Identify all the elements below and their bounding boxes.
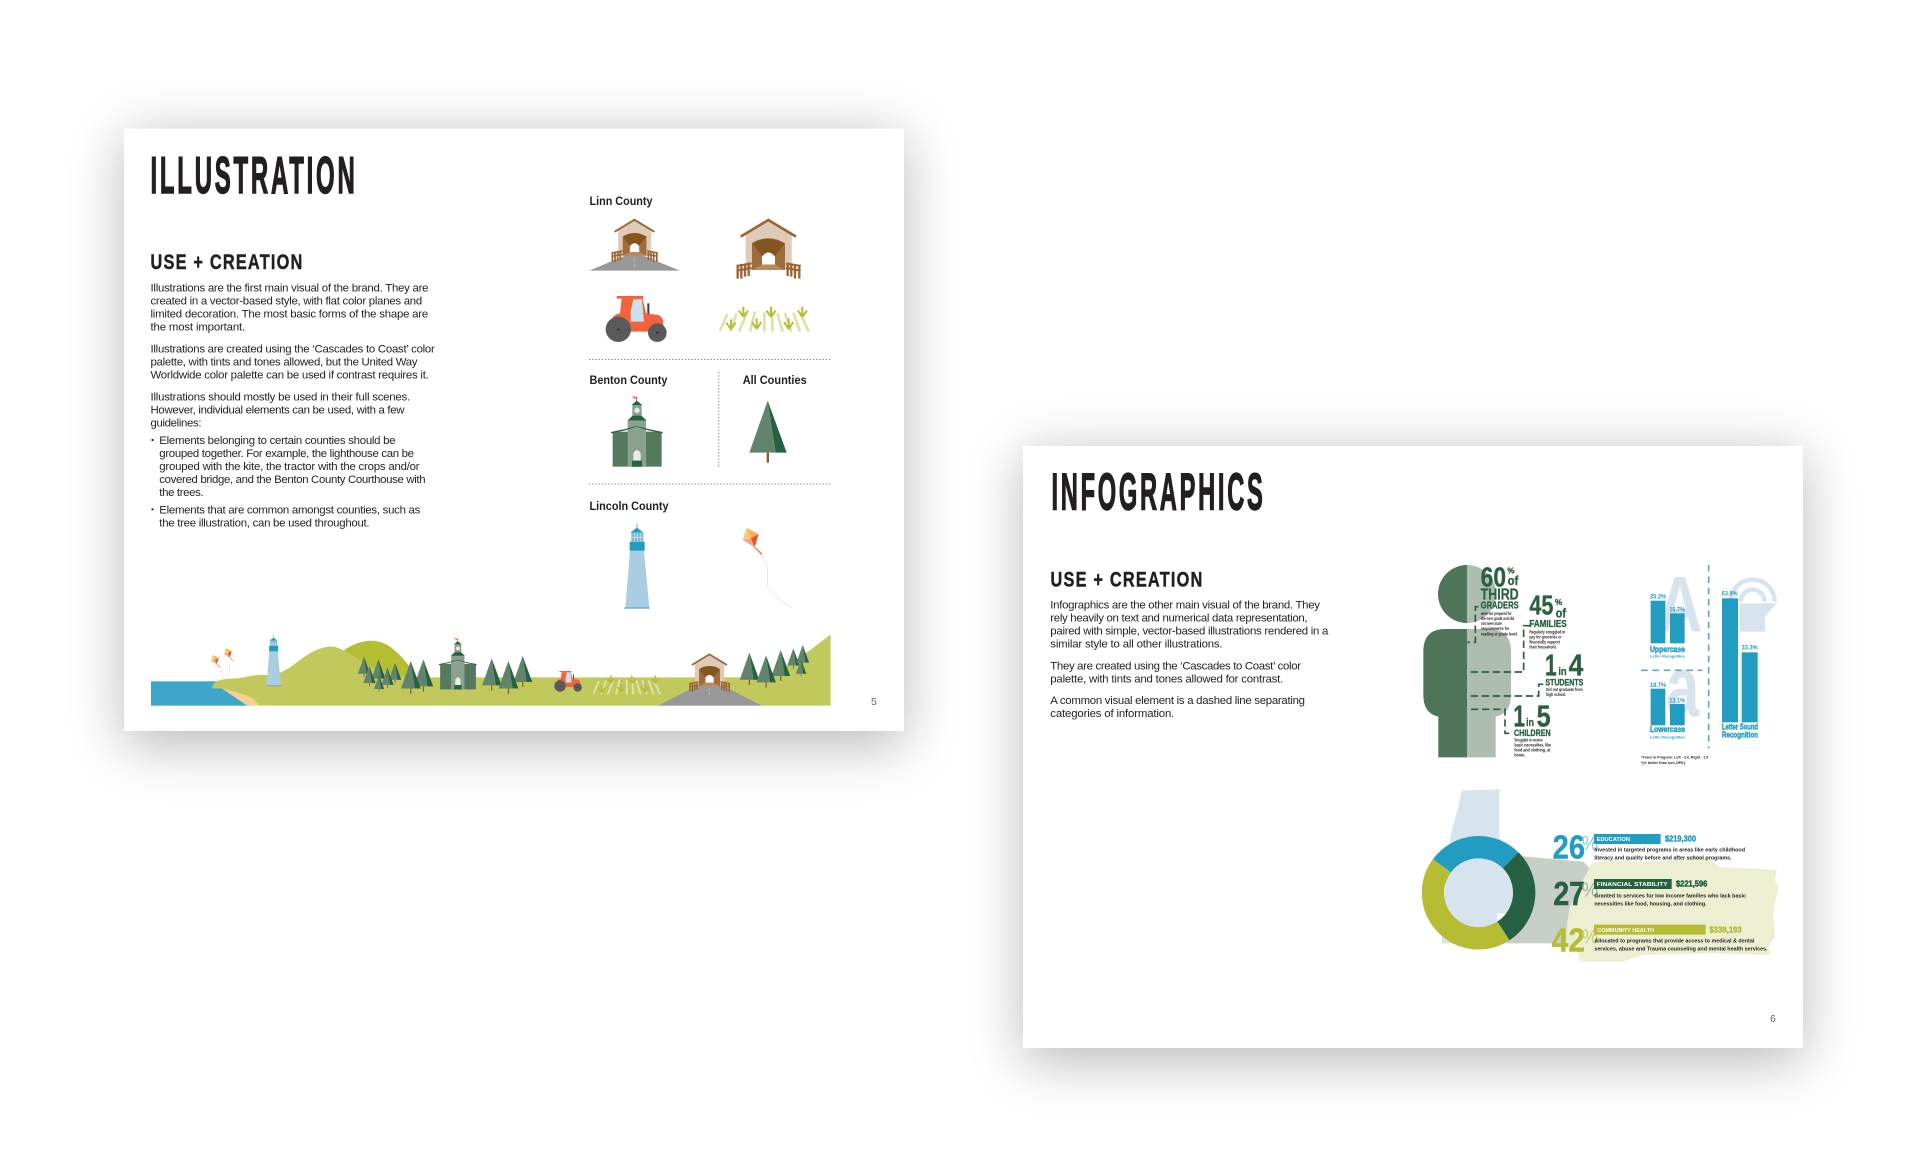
bar labels: Letter Sound	[1722, 723, 1758, 732]
stat: 45 percent of families: of	[1556, 606, 1567, 620]
stat: 60 percent of third graders: the next grade and did	[1481, 616, 1515, 621]
footnote	[1641, 754, 1709, 765]
bar labels: Lowercase	[1650, 725, 1685, 734]
row: community health: Allocated to programs that provide access to medical & dental	[1594, 939, 1755, 945]
row: community health: %	[1582, 926, 1599, 948]
text block: illustration guidance: Illustrations are the first main visual of the brand. They are	[150, 282, 428, 294]
label: Lincoln County: Lincoln County	[590, 499, 669, 513]
page shadows	[124, 136, 904, 746]
stat: 1 in 4 students: high school.	[1546, 692, 1566, 697]
map: state shapes	[1442, 789, 1778, 962]
panel: illustration page: ILLUSTRATION	[150, 147, 358, 205]
stat: 45 percent of families	[1529, 589, 1567, 649]
bar labels: Letter Recognition	[1650, 654, 1686, 659]
text block: illustration guidance: covered bridge, and the Benton County Courthouse with	[159, 474, 426, 486]
text block: infographic guidance: They are created using the ‘Cascades to Coast’ color	[1050, 660, 1301, 672]
row: community health: $338,193	[1709, 926, 1742, 935]
stat: 1 in 4 students: 4	[1569, 649, 1583, 683]
stat: 60 percent of third graders: of	[1508, 574, 1519, 588]
stat: 1 in 4 students: 1	[1545, 649, 1557, 683]
stat: 45 percent of families: %	[1555, 598, 1562, 607]
label: Benton County: Benton County	[590, 373, 668, 387]
row: education: 26	[1553, 829, 1585, 866]
heading: use and creation: USE + CREATION	[1050, 568, 1204, 592]
text block: infographic guidance: rely heavily on text and numerical data representation,	[1050, 612, 1308, 624]
text block: illustration guidance: Elements that are common amongst counties, such as	[159, 504, 421, 516]
bar chart: letter recognition	[1641, 561, 1777, 765]
bars	[1651, 598, 1758, 725]
stat: 60 percent of third graders: 60	[1481, 562, 1506, 593]
bar labels	[1650, 645, 1758, 740]
stat: 60 percent of third graders: requirements for	[1481, 626, 1510, 631]
row: community health: services, abuse and Trauma counseling and mental health services.	[1594, 947, 1768, 953]
stat: 1 in 5 children	[1513, 700, 1552, 758]
infographic: person statistics	[1423, 562, 1583, 758]
stat: 45 percent of families: financially support	[1529, 639, 1561, 644]
row: community health: COMMUNITY HEALTH	[1597, 928, 1654, 934]
text block: illustration guidance: guidelines:	[150, 417, 202, 429]
stat: 1 in 5 children: CHILDREN	[1514, 728, 1551, 738]
stat: 1 in 4 students: STUDENTS	[1545, 677, 1583, 687]
bar values: 63.9%	[1722, 592, 1738, 598]
row: financial stability: FINANCIAL STABILITY	[1597, 882, 1668, 888]
bar values: 33.3%	[1742, 646, 1758, 652]
row: education	[1553, 829, 1746, 866]
row: financial stability: necessities like food, housing, and clothing.	[1594, 901, 1707, 907]
bar values: 13.1%	[1669, 698, 1686, 704]
icon: covered bridge	[737, 220, 801, 279]
text block: illustration guidance: the trees.	[159, 487, 204, 499]
row: financial stability: %	[1582, 880, 1599, 902]
text block: infographic guidance: palette, with tints and tones allowed for contrast.	[1050, 673, 1283, 685]
icon: kite	[743, 528, 793, 608]
text block: illustration guidance: palette, with tints and tones allowed, but the United Way	[150, 357, 418, 369]
text block: illustration guidance: Illustrations should mostly be used in their full scenes.	[150, 391, 410, 403]
illustration elements: Lincoln County	[624, 523, 793, 609]
text block: illustration guidance: grouped with the kite, the tractor with the crops and/or	[159, 461, 420, 473]
label: All Counties: All Counties	[743, 373, 807, 387]
stat: 60 percent of third graders: GRADERS	[1481, 600, 1519, 611]
footnote: *Years in Program: Left - 3.0, Right - 1.5	[1641, 754, 1709, 759]
heading: use and creation: USE + CREATION	[150, 250, 304, 274]
stat: 60 percent of third graders: THIRD	[1481, 586, 1519, 603]
row: education: literacy and quality before and after school programs.	[1594, 855, 1732, 861]
stat: 45 percent of families: Regularly struggled to	[1529, 629, 1566, 634]
stat: 45 percent of families: pay for groceries or	[1529, 634, 1562, 639]
row: education: %	[1582, 833, 1599, 855]
footnote: *(% better than non-OPK)	[1641, 760, 1686, 765]
icon: courthouse	[611, 396, 663, 467]
donut chart	[1433, 847, 1524, 938]
panel: illustration page	[124, 129, 904, 731]
bar values: 25.2%	[1650, 595, 1667, 601]
row: education: $219,300	[1665, 835, 1697, 844]
bar values: 18.7%	[1650, 683, 1667, 689]
text block: infographic guidance: similar style to all other illustrations.	[1050, 638, 1223, 650]
icon: covered bridge with road	[589, 220, 680, 271]
page number 6: 6	[1770, 1013, 1776, 1025]
stat: 1 in 5 children: 5	[1537, 700, 1551, 734]
text block: illustration guidance: Worldwide color palette can be used if contrast requires it.	[150, 370, 429, 382]
text block: illustration guidance: However, individual elements can be used, with a few	[150, 404, 405, 416]
stat: 1 in 5 children: 1	[1513, 700, 1525, 734]
text block: illustration guidance	[150, 282, 435, 529]
icon: tree	[749, 401, 787, 463]
text block: infographic guidance	[1050, 599, 1329, 720]
text block: infographic guidance: paired with simple, vector-based illustrations rendered in a	[1050, 625, 1329, 637]
stat: 1 in 4 students: Did not graduate from	[1546, 687, 1583, 692]
text block: illustration guidance: the tree illustration, can be used throughout.	[159, 517, 370, 529]
background letter A: A	[1657, 561, 1702, 649]
page number 5: 5	[871, 696, 877, 708]
stat: 60 percent of third graders: %	[1507, 566, 1514, 575]
infographic: donut and funding breakdown	[1433, 789, 1778, 962]
row: community health: 42	[1552, 923, 1585, 960]
icon: tractor	[606, 296, 667, 342]
stat: 60 percent of third graders	[1480, 562, 1519, 637]
stat: 60 percent of third graders: were not prepared for	[1480, 611, 1512, 616]
text block: infographic guidance: Infographics are the other main visual of the brand. They	[1050, 599, 1320, 611]
text block: illustration guidance: created in a vector-based style, with flat color planes and	[150, 296, 422, 308]
stat: 45 percent of families: FAMILIES	[1529, 619, 1567, 630]
row: financial stability: 27	[1553, 876, 1585, 913]
text block: illustration guidance: the most important.	[150, 322, 245, 334]
stat: 1 in 5 children: in	[1526, 717, 1534, 729]
text block: infographic guidance: categories of information.	[1050, 708, 1174, 720]
stat: 1 in 5 children: Struggled to receive	[1514, 738, 1543, 743]
row: financial stability: Granted to services for low income families who lack basic	[1594, 893, 1746, 899]
row: community health	[1552, 923, 1768, 960]
text block: illustration guidance: limited decoration. The most basic forms of the shape are	[150, 308, 428, 320]
illustration elements: Linn County	[589, 220, 809, 467]
icon: lighthouse	[624, 523, 650, 609]
icon: crops	[720, 307, 809, 332]
row: financial stability	[1553, 876, 1746, 913]
stat: 45 percent of families: 45	[1529, 589, 1553, 620]
label: Linn County: Linn County	[590, 194, 653, 208]
stat: 60 percent of third graders: reading at grade level.	[1481, 632, 1518, 637]
panel: infographics page: INFOGRAPHICS	[1052, 464, 1266, 522]
stat: 1 in 5 children: food and clothing, at	[1514, 748, 1551, 753]
row: financial stability: $221,596	[1676, 880, 1708, 889]
bar labels: Uppercase	[1650, 645, 1685, 654]
icon: sound speaker	[1731, 580, 1777, 632]
text block: infographic guidance: A common visual element is a dashed line separating	[1050, 695, 1305, 707]
text block: illustration guidance: Illustrations are created using the ‘Cascades to Coast’ color	[150, 344, 435, 356]
row: education: Invested in targeted programs in areas like early childhood	[1594, 847, 1746, 853]
panel: infographics page	[1023, 446, 1803, 1048]
text block: illustration guidance: Elements belonging to certain counties should be	[159, 435, 396, 447]
text block: illustration guidance: grouped together. For example, the lighthouse can be	[159, 448, 414, 460]
row: education: EDUCATION	[1597, 837, 1630, 843]
stat: 1 in 5 children: basic necessities, like	[1514, 743, 1552, 748]
icon: person silhouette	[1423, 565, 1511, 757]
stat: 45 percent of families: their household.	[1529, 644, 1557, 649]
stat: 1 in 4 students	[1545, 649, 1583, 697]
bar values: 15.7%	[1669, 607, 1686, 613]
stat: 60 percent of third graders: not meet state	[1481, 621, 1502, 626]
bar labels: Recognition	[1722, 731, 1758, 740]
bar values	[1650, 592, 1758, 704]
scene: landscape banner	[151, 634, 831, 706]
stat: 1 in 4 students: in	[1558, 666, 1567, 678]
bar labels: Letter Recognition	[1650, 735, 1686, 740]
stat: 1 in 5 children: home.	[1514, 753, 1525, 758]
background letter a: a	[1666, 640, 1700, 735]
